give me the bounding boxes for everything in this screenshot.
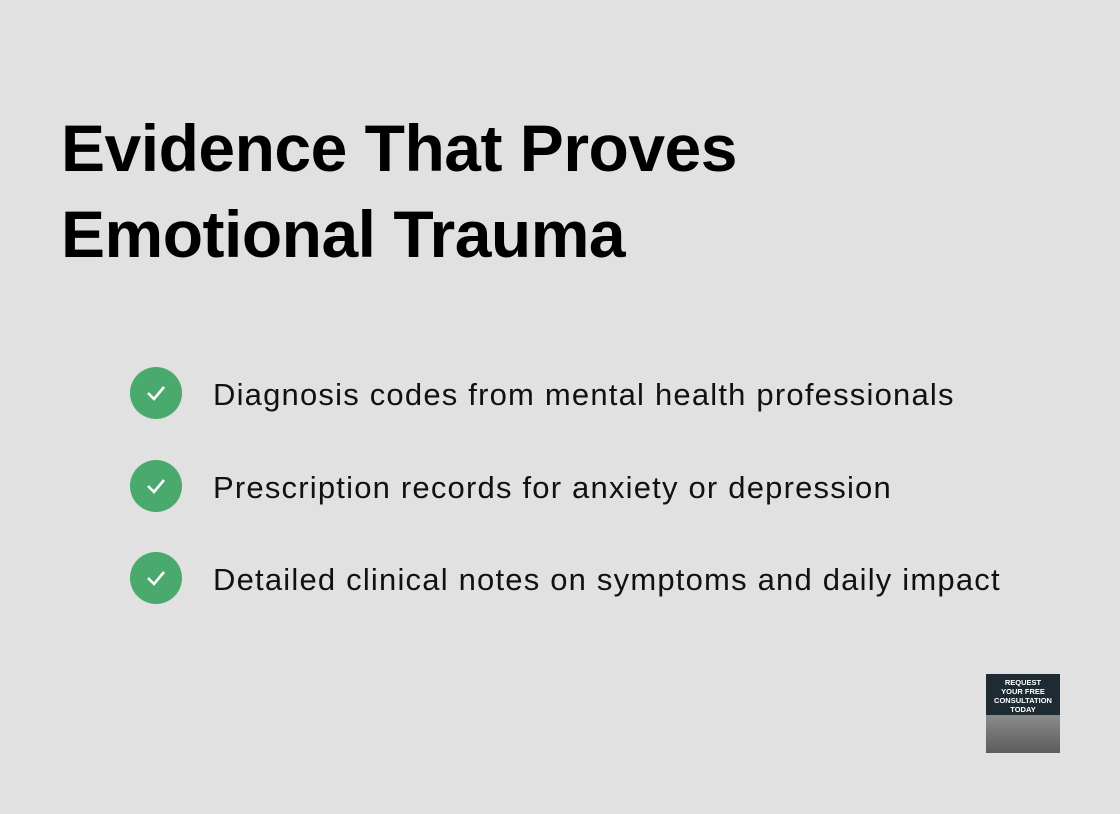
text 2: Prescription records for anxiety or depression [213, 470, 892, 505]
badge photo [986, 715, 1060, 754]
badge text: REQUEST [1005, 678, 1041, 687]
icon: check [130, 552, 182, 604]
item 3 [130, 552, 1001, 604]
icon: check [130, 367, 182, 419]
badge text: CONSULTATION [994, 696, 1052, 705]
icon: check [130, 460, 182, 512]
text 1: Diagnosis codes from mental health professionals [213, 377, 955, 412]
badge text: YOUR FREE [1001, 687, 1045, 696]
logo badge [986, 674, 1060, 753]
badge text [994, 678, 1052, 714]
title [61, 111, 737, 271]
badge text: TODAY [1010, 705, 1036, 714]
title: Evidence That Proves [61, 111, 737, 185]
item 1 [130, 367, 955, 419]
text 3: Detailed clinical notes on symptoms and daily impact [213, 562, 1001, 597]
title: Emotional Trauma [61, 197, 625, 271]
item 2 [130, 460, 892, 512]
